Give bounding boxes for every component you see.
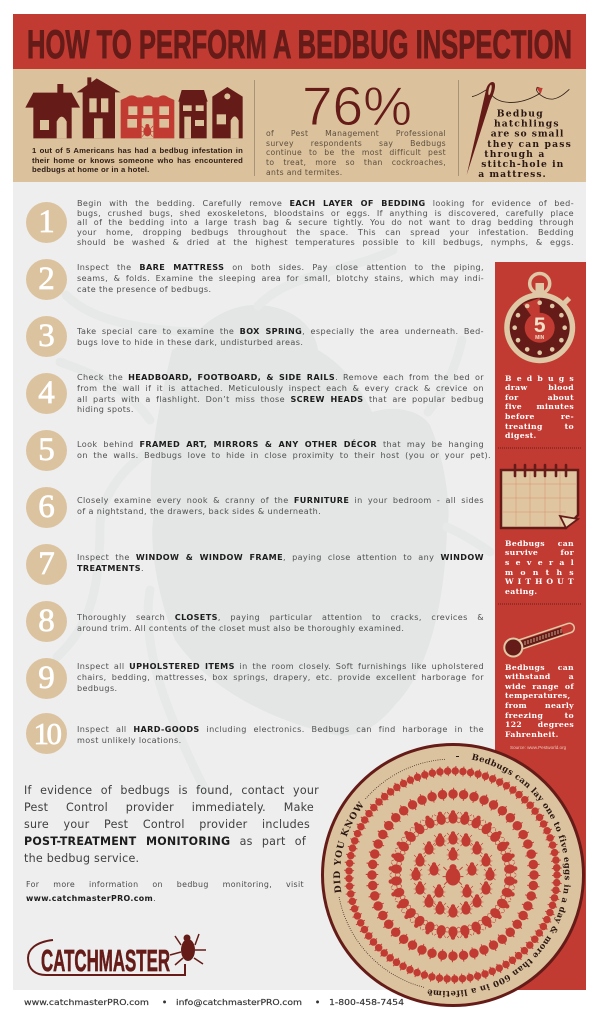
text: source: Source: www.Pestworld.org [510,745,566,750]
step 8 [26,601,484,642]
step 4: all parts with a flashlight. Don’t miss those SCREW HEADS that are popular bedbug [77,394,484,404]
callout: contact your pest control provider: If evidence of bedbugs is found, contact your [24,784,319,796]
text: pest professionals survey: to treat, more so than cockroaches, [266,158,446,167]
step 2 [26,259,484,300]
divider dots [498,448,581,604]
step 3: bugs love to hide in these dark, undisturbed areas. [77,336,303,346]
text: bedbug hatchlings: are so small [491,129,564,140]
text: more information: www.catchmasterPRO.com. [26,894,156,903]
footer contact line: 1-800-458-7454 [329,998,404,1007]
step 3: Take special care to examine the BOX SPRING, especially the area underneath. Bed- [77,326,484,336]
step 10: 10 [34,716,60,750]
text: draw blood for five minutes: treating to [505,422,574,431]
inner rings of bugs [410,831,497,917]
icon: thermometer [503,622,575,658]
step 2: cate the presence of bedbugs. [77,284,211,294]
step 8: around trim. All contents of the closet must also be thoroughly examined. [77,623,404,633]
footer contact line: info@catchmasterPRO.com [176,998,302,1007]
callout: contact your pest control provider: sure your Pest Control provider includes [24,818,310,830]
text: bedbug hatchlings: through a [484,149,544,160]
text: 1 out of 5 Americans: 1 out of 5 Americans has had a bedbug infestation in [32,146,243,155]
text: bedbug hatchlings: they can pass [487,139,571,150]
dotted arcs [339,759,445,987]
footer contact line [24,998,404,1007]
step 7: Inspect the WINDOW & WINDOW FRAME, paying close attention to any WINDOW [77,552,484,562]
step 10 [26,713,484,754]
step 4: from the wall if it is attached. Meticulously inspect each & every crack & crevice on [77,383,484,393]
step 2: Inspect the BARE MATTRESS on both sides. Pay close attention to the piping, [77,262,484,272]
step 10: Inspect all HARD-GOODS including electronics. Bedbugs can find harborage in the [77,724,484,734]
icon: five minute stopwatch: MIN [535,335,545,341]
text: 1 out of 5 Americans: bedbugs at home or in a hotel. [32,165,149,174]
step 2: 2 [38,260,55,296]
step 3: 3 [38,318,55,354]
logo: catchmaster: CATCHMASTER [41,943,170,978]
panel: statistics strip [13,69,586,182]
text: withstand temperatures: 122 degrees [505,720,574,729]
text: draw blood for five minutes: five minutes [505,402,574,411]
step 6 [26,487,484,528]
step 4 [26,372,484,414]
text: pest professionals survey: continue to be the most difficult pest [266,148,446,157]
text: draw blood for five minutes: B e d b u g s [505,374,574,382]
text: withstand temperatures: withstand a [505,672,574,681]
text: 1 out of 5 Americans: their home or knows someone who has encountered [32,156,243,165]
step 3 [26,316,484,357]
text: survive for several months: survive for [505,548,574,557]
callout: contact your pest control provider: Pest Control provider immediately. Make [24,800,314,814]
stat: 76%: 76% [302,75,412,137]
chart: circular did you know bug diagram [321,743,585,1007]
text: pest professionals survey: survey respondents say Bedbugs [266,139,446,148]
divider left [254,80,255,176]
text: withstand temperatures [504,662,574,739]
step 7: 7 [38,546,55,582]
step 8: Thoroughly search CLOSETS, paying particular attention to cracks, crevices & [77,612,484,622]
text: bedbug hatchlings: Bedbug [497,108,543,120]
center bug [443,864,464,885]
step 1: your home, dropping bedbugs throughout the space. This can spread your infestation. Bedding [77,227,574,237]
text: survive for several months [504,539,574,596]
step 5: Look behind FRAMED ART, MIRRORS & ANY OTHER DÉCOR that may be hanging [77,439,484,449]
text: withstand temperatures: Bedbugs can [505,662,574,672]
step 5: on the walls. Bedbugs love to hide in close proximity to their host (you or your pet). [77,450,491,460]
callout: contact your pest control provider: the bedbug service. [24,852,139,864]
callout: contact your pest control provider [24,784,319,864]
step 9: Inspect all UPHOLSTERED ITEMS in the room closely. Soft furnishings like upholstered [77,661,484,671]
text: withstand temperatures: temperatures, [505,691,571,700]
step 9: 9 [38,660,55,696]
step 1: 1 [38,204,55,240]
step 1: Begin with the bedding. Carefully remove EACH LAYER OF BEDDING looking for evidence of bed- [77,198,574,208]
text: survive for several months: W I T H O U T [505,577,574,586]
divider right [458,80,459,176]
text: draw blood for five minutes [505,374,574,440]
step 1: all of the bedding into a large trash bag & secure tightly. You do not want to drag bedding through [77,217,574,227]
footer contact line: • [315,998,320,1007]
step 8: 8 [38,602,55,638]
text: draw blood for five minutes: before re- [505,412,574,421]
step 10: most unlikely locations. [77,735,182,745]
text: bedbug hatchlings [478,108,571,180]
step 4: Check the HEADBOARD, FOOTBOARD, & SIDE RAILS. Remove each from the bed or [77,372,484,382]
text: draw blood for five minutes: digest. [505,431,537,440]
text: bedbug hatchlings: hatchlings [494,119,558,130]
logo: catchmaster [27,934,206,978]
small dash marks [429,756,459,994]
icon: five minute stopwatch [504,272,576,364]
step 9: bedbugs. [77,683,118,693]
icon: row of houses [25,77,243,138]
step 9 [26,658,484,699]
step 6: of a nightstand, the drawers, back sides & underneath. [77,506,321,516]
callout: contact your pest control provider: POST-TREATMENT MONITORING as part of [24,834,306,848]
step 4: hiding spots. [77,404,134,414]
text: survive for several months: eating. [505,587,537,596]
outer rings of bugs [349,770,557,978]
text: survive for several months: m o n t h s [505,568,574,577]
text: pest professionals survey [266,129,446,177]
step 7: TREATMENTS. [77,563,144,573]
step 1 [26,198,574,247]
panel: did you know sidebar [495,262,586,990]
text: withstand temperatures: wide range of [505,682,574,691]
text: more information: For more information on bedbug monitoring, visit [26,880,304,889]
text: withstand temperatures: Fahrenheit. [505,730,559,739]
step 9: chairs, bedding, mattresses, box springs, drapery, etc. provide excellent harborage for [77,672,484,682]
step 5: 5 [38,432,55,468]
text: draw blood for five minutes: for about [505,393,574,402]
text: pest professionals survey: of Pest Management Professional [266,129,446,138]
step 6: Closely examine every nook & cranny of the FURNITURE in your bedroom - all sides [77,495,484,505]
step 4: 4 [38,374,55,410]
icon: five minute stopwatch: 5 [534,314,546,337]
step 7 [26,544,484,585]
panel: inspection steps background [13,182,586,990]
icon: calendar [500,464,580,530]
text: withstand temperatures: from nearly [505,701,574,710]
footer contact line: • [162,998,167,1007]
step 2: seams, & folds. Examine the sleeping area for small, blotchy stains, which may indi- [77,273,484,283]
step 1: bugs, crushed bugs, shed exoskeletons, bloodstains or eggs. If anything is discovered, carefully place [77,208,574,218]
middle ring of bugs [388,810,518,939]
text: bedbug hatchlings: stitch-hole in [481,159,564,170]
text: survive for several months: Bedbugs can [505,539,574,548]
text: bedbug hatchlings: a mattress. [478,169,546,180]
text: 1 out of 5 Americans [32,146,243,174]
text: draw blood for five minutes: draw blood [505,383,574,392]
curved text: did you know: DID YOU KNOW [333,800,363,894]
step 1: should be washed & dried at the highest temperatures possible to kill bedbugs, nymphs, & eggs. [77,237,574,247]
text: more information [26,880,304,903]
step 5 [26,430,491,471]
text: survive for several months: s e v e r a l [505,558,574,567]
curved text: eggs fact: Bedbugs can lay one to five eggs in a day & more than 600 in a lifetime [428,754,571,998]
icon: needle and thread [466,82,570,175]
footer contact line: www.catchmasterPRO.com [24,998,149,1007]
text: withstand temperatures: freezing to [505,711,574,720]
text: pest professionals survey: ants and termites. [266,168,342,177]
step 6: 6 [38,488,55,524]
